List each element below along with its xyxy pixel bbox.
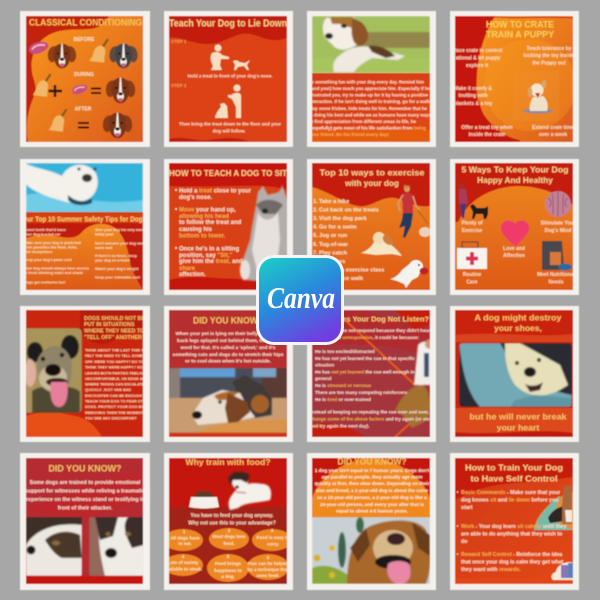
panel: classical conditioning: AFTER xyxy=(75,106,92,112)
panel: dog years: 24-year-old person, and every year after that is xyxy=(320,502,424,507)
panel: did you know sploot xyxy=(169,310,287,437)
panel: teach your dog to lie down: STEP 2 xyxy=(171,83,187,88)
panel: did you know witnesses xyxy=(25,458,145,584)
panel: a dog might destroy your shoes: your heart xyxy=(497,422,539,432)
panel: how to crate train a puppy: Make it comfy & xyxy=(454,86,492,92)
panel: top 10 ways to exercise: Take a nice walk xyxy=(319,276,364,282)
panel: why does your dog not listen: He is too excited/distracted xyxy=(315,349,375,354)
panel: how to train self control: to Have Self Control xyxy=(470,474,558,484)
panel: top 10 ways to exercise: Jog or run xyxy=(319,233,348,239)
panel: dogs should not tell off: PUT IN SITUATIONS xyxy=(84,322,135,328)
panel: how to crate train a puppy: rational & let puppy xyxy=(454,56,501,62)
panel: dogs should not tell off: THINK ABOUT THE LAST TIME YOU xyxy=(85,348,149,352)
panel: summer safety tips: your dog in a hot car xyxy=(24,232,61,236)
panel: top 10 ways to exercise: Play catch xyxy=(319,250,348,256)
panel: top 10 ways to exercise xyxy=(312,163,431,290)
panel: top 10 ways to exercise: Tug-of-war xyxy=(319,242,349,248)
panel: 5 ways to keep your dog happy: Routine xyxy=(463,272,482,278)
icon: food bag xyxy=(542,241,572,270)
panel: why train with food: 6 xyxy=(267,555,270,560)
photo: dog right xyxy=(89,517,144,576)
panel: how to train self control: Basic Commands - Make sure that your xyxy=(461,490,560,496)
panel: dog years: DID YOU KNOW? xyxy=(338,456,406,466)
panel: why train with food: carry. xyxy=(267,542,279,546)
panel: why does your dog not listen: and try again the next day). xyxy=(310,424,369,428)
icon: black dog xyxy=(470,204,488,219)
panel: teach your dog to lie down: Then bring the treat down to the floor and your xyxy=(179,122,281,126)
panel: dog years: as a 15-year-old person, a 2-year-old dog is like a xyxy=(317,495,427,500)
panel: classical conditioning: DURING xyxy=(74,72,94,78)
icon: puppy xyxy=(522,79,554,114)
photo: husky xyxy=(240,185,290,282)
panel: summer safety tips: swim well xyxy=(95,246,112,250)
panel: 5 ways to keep your dog happy: Affection xyxy=(503,253,525,259)
panel: why train with food: available to steak. xyxy=(164,566,202,572)
panel: a dog might destroy your shoes: but he will never break xyxy=(470,412,567,422)
panel: how to crate train a puppy: Teach tolerance by xyxy=(527,46,572,52)
panel: how to crate train a puppy: blankets & a toy xyxy=(454,101,492,107)
icon: beagle with teal blob xyxy=(534,486,573,530)
panel: did you know sploot: something cats and dogs do to stretch their hips xyxy=(172,352,284,358)
panel: did you know sploot: word for that. It's called a 'sploot,' and it's xyxy=(180,345,276,351)
panel: teach your dog to lie down xyxy=(169,16,287,142)
panel: why does your dog not listen: If your dog does not respond because they didn't hear xyxy=(311,328,430,333)
panel: why train with food: 5 xyxy=(227,554,230,559)
panel: why does your dog not listen: He has not yet learned the cue well enough in xyxy=(315,370,415,374)
panel: how to train self control: that once your dog is calm they get what xyxy=(461,560,564,566)
panel: teach your dog to lie down: Hold a treat in front of your dog's nose. xyxy=(188,74,272,78)
panel: dogs should not tell off xyxy=(24,310,155,437)
panel: how to train self control: do xyxy=(461,539,468,545)
panel: dogs should not tell off: DOGS. PROTECT YOUR DOG BY xyxy=(85,405,144,409)
panel: summer safety tips: to fresh drinking water and shade xyxy=(24,271,83,275)
photo: beagle lying on floor xyxy=(169,368,287,433)
panel: top 10 ways to exercise: 1. xyxy=(313,199,318,205)
panel: dogs should not tell off: ENCOUNTER CAN BE ENOUGH TO xyxy=(85,394,148,398)
panel: a dog might destroy your shoes: A dog might destroy xyxy=(474,312,562,322)
panel: did you know witnesses: front of their attacker. xyxy=(58,506,113,512)
panel: do something fun every day: (and you!) how much you appreciate him. Especially if he xyxy=(310,86,430,92)
panel: top 10 ways to exercise: 6. xyxy=(313,242,318,248)
panel: did you know sploot: DID YOU KNOW? xyxy=(193,316,263,326)
icon: man walking a dog xyxy=(398,185,431,238)
panel: how to teach a dog to sit: Hold a treat close to your xyxy=(179,188,252,194)
panel: top 10 ways to exercise: Cut back on the treats xyxy=(319,208,379,214)
panel: summer safety tips: Give your dog his very own xyxy=(95,228,144,232)
panel: dogs should not tell off: FELT THE NEED TO TELL SOMEONE xyxy=(85,354,151,358)
panel: 5 ways to keep your dog happy: Stimulate Your xyxy=(541,220,575,226)
panel: do something fun every day: (hopefully) gets most of his life satisfaction from being xyxy=(309,126,426,132)
panel: dogs should not tell off: DOGS SHOULD NOT BE xyxy=(84,316,145,322)
panel: why does your dog not listen: Instead of keeping on repeating the cue over and over, xyxy=(310,410,429,414)
panel: why train with food: happiness to xyxy=(214,568,242,573)
icon: woman walking xyxy=(459,184,468,218)
panel: dog years xyxy=(312,456,430,584)
panel: how to crate train a puppy: Offer a treat toy when xyxy=(461,125,513,131)
panel: why train with food: Most dogs love xyxy=(213,534,246,539)
panel: how to teach a dog to sit: to follow the treat and xyxy=(179,220,242,226)
panel: how to train self control: How to Train Your Dog xyxy=(465,462,563,472)
panel: top 10 ways to exercise: 4. xyxy=(313,224,318,230)
icon: golden puppy xyxy=(361,232,402,256)
panel: 5 ways to keep your dog happy: Meet Nutritional xyxy=(537,272,575,278)
panel: why train with food: a dog. xyxy=(221,574,235,579)
panel: summer safety tips xyxy=(22,163,146,290)
panel: why train with food: Lots of variety xyxy=(168,560,199,565)
panel: do something fun every day: to find appreciation from different areas in life, he xyxy=(309,119,416,125)
panel: why train with food: You have to feed your dog anyway. xyxy=(191,513,274,519)
panel: did you know sploot: or to cool down when it's hot outside. xyxy=(185,358,271,364)
panel: top 10 ways to exercise: Top 10 ways to exercise xyxy=(320,168,425,178)
panel: did you know witnesses: DID YOU KNOW? xyxy=(48,464,122,474)
panel: dogs should not tell off: WHERE THEY NEED TO xyxy=(84,328,144,334)
panel: teach your dog to lie down: STEP 1 xyxy=(171,39,187,44)
panel: how to crate train a puppy: Extend crate time xyxy=(532,125,574,131)
photo: dog on owner's arm xyxy=(459,343,572,407)
photo: beagle on grass xyxy=(312,16,430,73)
photo: dog in pool xyxy=(26,163,143,213)
panel: 5 ways to keep your dog happy: Plenty of xyxy=(461,220,483,226)
panel: how to teach a dog to sit: position, say "Sit," xyxy=(179,253,233,259)
panel: do something fun every day xyxy=(308,16,432,142)
photo: jack russell lying xyxy=(228,472,271,510)
panel: why train with food: by a technique that xyxy=(247,567,289,572)
panel: how to train self control: Reward Self Control - Reinforce the idea xyxy=(461,552,562,558)
panel: dogs should not tell off: TEACH YOUR DOG TO FEAR OTHER xyxy=(85,400,151,404)
panel: summer safety tips: your dog on a leash xyxy=(95,258,131,262)
panel: how to crate train a puppy: inside the crate xyxy=(469,132,506,138)
panel: do something fun every day: play some frisbee, hide treats for him. Remember that he xyxy=(309,106,427,112)
panel: how to train self control: are able to do anything that they wish to xyxy=(461,532,563,538)
panel: how to crate train a puppy: over a week xyxy=(539,132,567,138)
panel: 5 ways to keep your dog happy: Exercise xyxy=(462,228,483,234)
panel: 5 ways to keep your dog happy: Care xyxy=(466,280,478,286)
panel: why train with food: to eat. xyxy=(178,541,192,546)
panel: why does your dog not listen: Why Does Your Dog Not Listen? xyxy=(314,314,429,324)
panel: summer safety tips: Your dog should always have access xyxy=(24,266,89,270)
panel: top 10 ways to exercise: 8. xyxy=(313,259,318,265)
panel: do something fun every day: interaction. If he isn't doing well in training, go for a walk, xyxy=(309,99,432,105)
panel: summer safety tips: Sweet tooth that'd leave xyxy=(24,228,66,232)
panel: teach your dog to lie down: dog will follow. xyxy=(213,128,245,134)
panel: did you know witnesses: support for witnesses while reliving a traumatic xyxy=(25,488,145,494)
panel: how to teach a dog to sit: share xyxy=(179,266,196,272)
panel: dogs should not tell off: "TELL OFF" ANOTHER DOG xyxy=(84,335,155,341)
panel: why train with food: uses food. xyxy=(257,573,279,578)
panel: dogs should not tell off: QUICKLY. JUST ONE BAD xyxy=(85,388,131,392)
icon: food bowl xyxy=(189,491,219,508)
panel: dog years: size and breed, a 1-year-old dog is about the same xyxy=(316,488,429,493)
panel: why train with food: Food is easy to xyxy=(257,535,290,540)
icon: person pointing at sitting dog xyxy=(215,84,241,118)
panel: dog years: age parallel to people, they actually age more xyxy=(321,474,423,480)
panel: how to train self control: dog knows sit and lie down before you xyxy=(461,498,558,504)
panel: top 10 ways to exercise: Take a hike xyxy=(319,199,349,205)
panel: how to teach a dog to sit: causing his xyxy=(179,227,213,233)
panel: why does your dog not listen: He is tired or over-trained xyxy=(315,397,371,402)
panel: classical conditioning: CLASSICAL CONDITIONING xyxy=(29,18,142,28)
panel: summer safety tips: Dogs get sunburns too! xyxy=(24,280,66,284)
panel: 5 ways to keep your dog happy: Love and xyxy=(503,246,525,252)
callout ovals xyxy=(163,528,292,582)
panel: classical conditioning xyxy=(26,14,143,142)
panel: a dog might destroy your shoes xyxy=(455,310,573,437)
panel: top 10 ways to exercise: 9. xyxy=(313,268,318,274)
panel: 5 ways to keep your dog happy: Needs xyxy=(548,280,564,286)
panel: why train with food: 3 xyxy=(271,528,274,533)
panel: how to crate train a puppy: locking the toy inside xyxy=(523,53,575,59)
panel: how to crate train a puppy xyxy=(452,16,576,142)
panel: 5 ways to keep your dog happy: Dog's Mind xyxy=(545,228,571,234)
panel: why does your dog not listen: you or are unresponsive, it could be because: xyxy=(319,335,419,340)
panel: why train with food: 1 xyxy=(183,529,186,534)
panel: did you know witnesses: experience on the witness stand or testifying in xyxy=(25,497,145,503)
panel: summer safety tips: from parasites like fleas, ticks, xyxy=(24,246,78,250)
panel: how to teach a dog to sit: allowing his head xyxy=(179,214,229,220)
panel: a dog might destroy your shoes: your shoes, xyxy=(494,323,542,333)
panel: summer safety tips: kiddy pool xyxy=(95,232,113,236)
panel: summer safety tips: Our Top 10 Summer Safety Tips for Dogs xyxy=(22,214,146,224)
panel: why train with food: food. xyxy=(224,541,234,546)
panel: top 10 ways to exercise: 3. xyxy=(313,216,318,222)
icon: white dog with toy xyxy=(390,260,428,288)
panel: summer safety tips: Keep your dog's paws cool xyxy=(24,258,72,262)
panel: dog years: 1 dog year isn't equal to 7 human years. Dogs don't xyxy=(315,468,430,473)
panel: how to teach a dog to sit xyxy=(169,163,290,290)
photo: smiling shepherd in flowers xyxy=(312,517,430,584)
photo: smiling shepherd xyxy=(24,328,82,413)
panel: why does your dog not listen: change some of the above factors and try again (or stop xyxy=(310,416,433,422)
panel: why train with food: Fear can be helped xyxy=(248,561,289,566)
icon: food packs with cloud xyxy=(551,562,574,580)
panel: top 10 ways to exercise: Go for a swim xyxy=(319,224,357,230)
panel: did you know sploot: back legs splayed out behind them, there's a xyxy=(177,338,279,344)
panel: why does your dog not listen: He is stressed or nervous xyxy=(315,383,372,388)
panel: dogs should not tell off: REMOVING THEM THE MOMENT xyxy=(85,411,144,415)
panel: how to train self control: Work - Your dog learn sit calmly until they xyxy=(461,524,566,530)
panel: dog years: quickly at first, then slow down. Depending on their xyxy=(315,481,430,486)
panel: how to teach a dog to sit: give him the treat, and xyxy=(179,259,243,265)
panel: 5 ways to keep your dog happy: 5 Ways To Keep Your Dog xyxy=(462,164,568,174)
panel: why train with food: 2 xyxy=(228,528,231,533)
panel: how to train self control xyxy=(455,458,574,584)
icon: first aid kit xyxy=(457,242,487,269)
panel: how to teach a dog to sit: bottom to lower. xyxy=(179,234,226,240)
panel: top 10 ways to exercise: with your dog xyxy=(344,179,399,188)
panel: dogs should not tell off: YOU SEE ANY DISCOMFORT xyxy=(85,416,137,420)
panel: why train with food: Food brings xyxy=(215,561,241,566)
panel: dogs should not tell off: THINK THEY WERE HAPPY? NO. IT xyxy=(85,366,149,370)
panel: dogs should not tell off: WHERE THINGS CAN ESCALATE xyxy=(85,382,145,386)
panel: classical conditioning: BEFORE xyxy=(74,37,95,43)
icon: person with dog xyxy=(211,44,250,70)
panel: why train with food: All dogs have xyxy=(170,536,200,540)
panel: why does your dog not listen: general xyxy=(315,376,331,381)
panel: how to crate train a puppy: explore it xyxy=(466,63,488,69)
icon: brain xyxy=(545,191,571,217)
panel: summer safety tips: and mosquitoes xyxy=(24,250,52,254)
panel: 5 ways to keep your dog happy: Happy And Healthy xyxy=(477,175,553,185)
panel: summer safety tips: Don't assume your dog can xyxy=(95,242,144,246)
panel: how to teach a dog to sit: HOW TO TEACH A DOG TO SIT xyxy=(169,168,288,178)
panel: did you know sploot: When your pet is lying on their belly with their xyxy=(175,331,281,337)
panel: do something fun every day: your friend. Be his friend every day! xyxy=(309,132,389,138)
panel: 5 ways to keep your dog happy xyxy=(455,163,575,290)
panel: summer safety tips: Make sure your dog is protected xyxy=(24,241,82,245)
panel: top 10 ways to exercise: 2. xyxy=(313,208,318,214)
Canva logo xyxy=(256,255,344,345)
panel: top 10 ways to exercise: 5. xyxy=(313,233,318,239)
panel: top 10 ways to exercise: Go for an exercise class xyxy=(319,268,384,274)
panel: summer safety tips: Watch your dog's weight xyxy=(95,267,139,271)
panel: how to crate train a puppy: Place crate in control xyxy=(452,48,503,54)
panel: how to crate train a puppy: HOW TO CRATE xyxy=(486,20,554,30)
panel: how to crate train a puppy: the Puppy out xyxy=(532,60,566,66)
panel: why train with food: Why not use this to your advantage? xyxy=(188,520,276,526)
panel: top 10 ways to exercise: 7. xyxy=(313,250,318,256)
icon: heart xyxy=(501,220,529,246)
panel: summer safety tips: Keep your sidewalks cool xyxy=(95,276,140,280)
photo: vet with dog xyxy=(395,339,435,428)
panel: did you know witnesses: Some dogs are trained to provide emotional xyxy=(30,480,141,486)
panel: top 10 ways to exercise: Visit the dog park xyxy=(319,216,367,222)
panel: why does your dog not listen: He has not yet learned the cue in that specific xyxy=(315,356,415,361)
panel: why train with food xyxy=(163,457,292,584)
panel: how to crate train a puppy: inviting with xyxy=(458,93,488,99)
panel: summer safety tips: If there's no fence, keep xyxy=(95,254,138,258)
panel: why does your dog not listen: situation xyxy=(315,362,334,368)
panel: do something fun every day: frustrated you, try to make up for it by having a positive xyxy=(310,92,428,98)
panel: why train with food: 4 xyxy=(182,554,185,559)
panel: why train with food: Why train with food? xyxy=(186,457,270,467)
Canva logo: Canva xyxy=(267,280,335,315)
panel: how to train self control: start xyxy=(461,505,473,511)
panel: teach your dog to lie down: Teach Your Dog to Lie Down xyxy=(169,18,287,30)
panel: how to teach a dog to sit: Move your hand up, xyxy=(179,208,236,214)
panel: do something fun every day: is doing his best and while we as humans have many ways xyxy=(309,112,431,118)
panel: dogs should not tell off: OFF. WERE YOU HAPPY? DO YOU xyxy=(85,360,147,364)
panel: dogs should not tell off: UNCOMFORTABLE, ON EDGE AND xyxy=(85,377,148,381)
panel: top 10 ways to exercise: 10. xyxy=(312,276,320,282)
panel: how to teach a dog to sit: affection. xyxy=(179,272,206,278)
panel: top 10 ways to exercise: Play days xyxy=(319,259,345,265)
panel: how to crate train a puppy: TRAIN A PUPPY xyxy=(486,30,555,40)
panel: why does your dog not listen xyxy=(310,310,435,437)
photo: dog left xyxy=(26,517,82,576)
panel: how to teach a dog to sit: dog's nose. xyxy=(179,195,212,201)
panel: dogs should not tell off: LEAVES BOTH PARTIES FEELING xyxy=(85,371,146,375)
panel: do something fun every day: Do something fun with your dog every day. Remind him xyxy=(308,80,424,86)
panel: how to teach a dog to sit: Once he's in a sitting xyxy=(179,246,239,252)
panel: how to train self control: they want with rewards. xyxy=(461,567,521,573)
panel: why does your dog not listen: There are too many competing reinforcers xyxy=(315,390,408,395)
panel: dog years: equal to about 4-5 human years. xyxy=(336,508,408,514)
